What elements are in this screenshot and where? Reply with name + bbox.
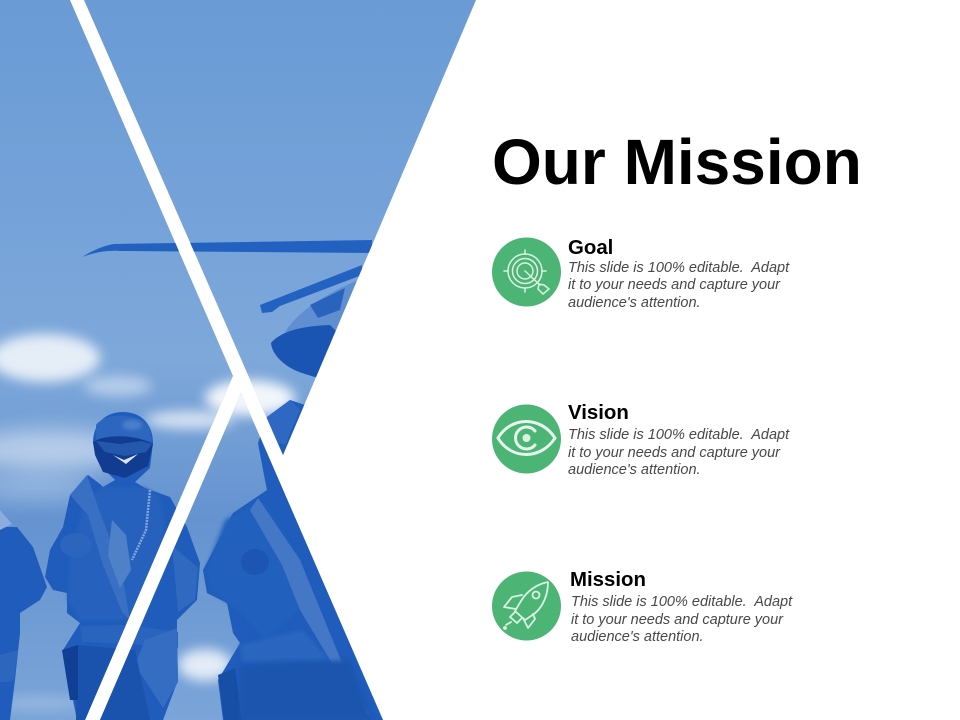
heading: mission: Mission bbox=[570, 569, 646, 591]
heading: vision: Vision bbox=[568, 402, 629, 424]
item: goal bbox=[492, 237, 790, 310]
item: vision bbox=[492, 402, 790, 478]
soldier left bbox=[0, 510, 47, 720]
photo collage: soldiers and helicopter in blue duotone bbox=[0, 0, 476, 720]
soldier right bbox=[203, 400, 395, 720]
item: mission bbox=[492, 569, 793, 645]
icon: target with arrow bbox=[492, 238, 561, 306]
soldier centre bbox=[45, 412, 200, 720]
title: Our Mission bbox=[492, 126, 862, 198]
clouds bbox=[0, 334, 295, 709]
icon: rocket bbox=[492, 572, 561, 640]
heading: goal: Goal bbox=[568, 237, 613, 259]
description: vision: This slide is 100% editable. Adapt it to your needs and capture your audience's attention. bbox=[568, 427, 789, 478]
helicopter bbox=[82, 240, 372, 378]
description: mission: This slide is 100% editable. Adapt it to your needs and capture your audience's attention. bbox=[571, 594, 792, 645]
sky background bbox=[0, 0, 480, 720]
description: goal: This slide is 100% editable. Adapt it to your needs and capture your audience's attention. bbox=[568, 260, 789, 310]
icon: eye bbox=[492, 404, 561, 474]
